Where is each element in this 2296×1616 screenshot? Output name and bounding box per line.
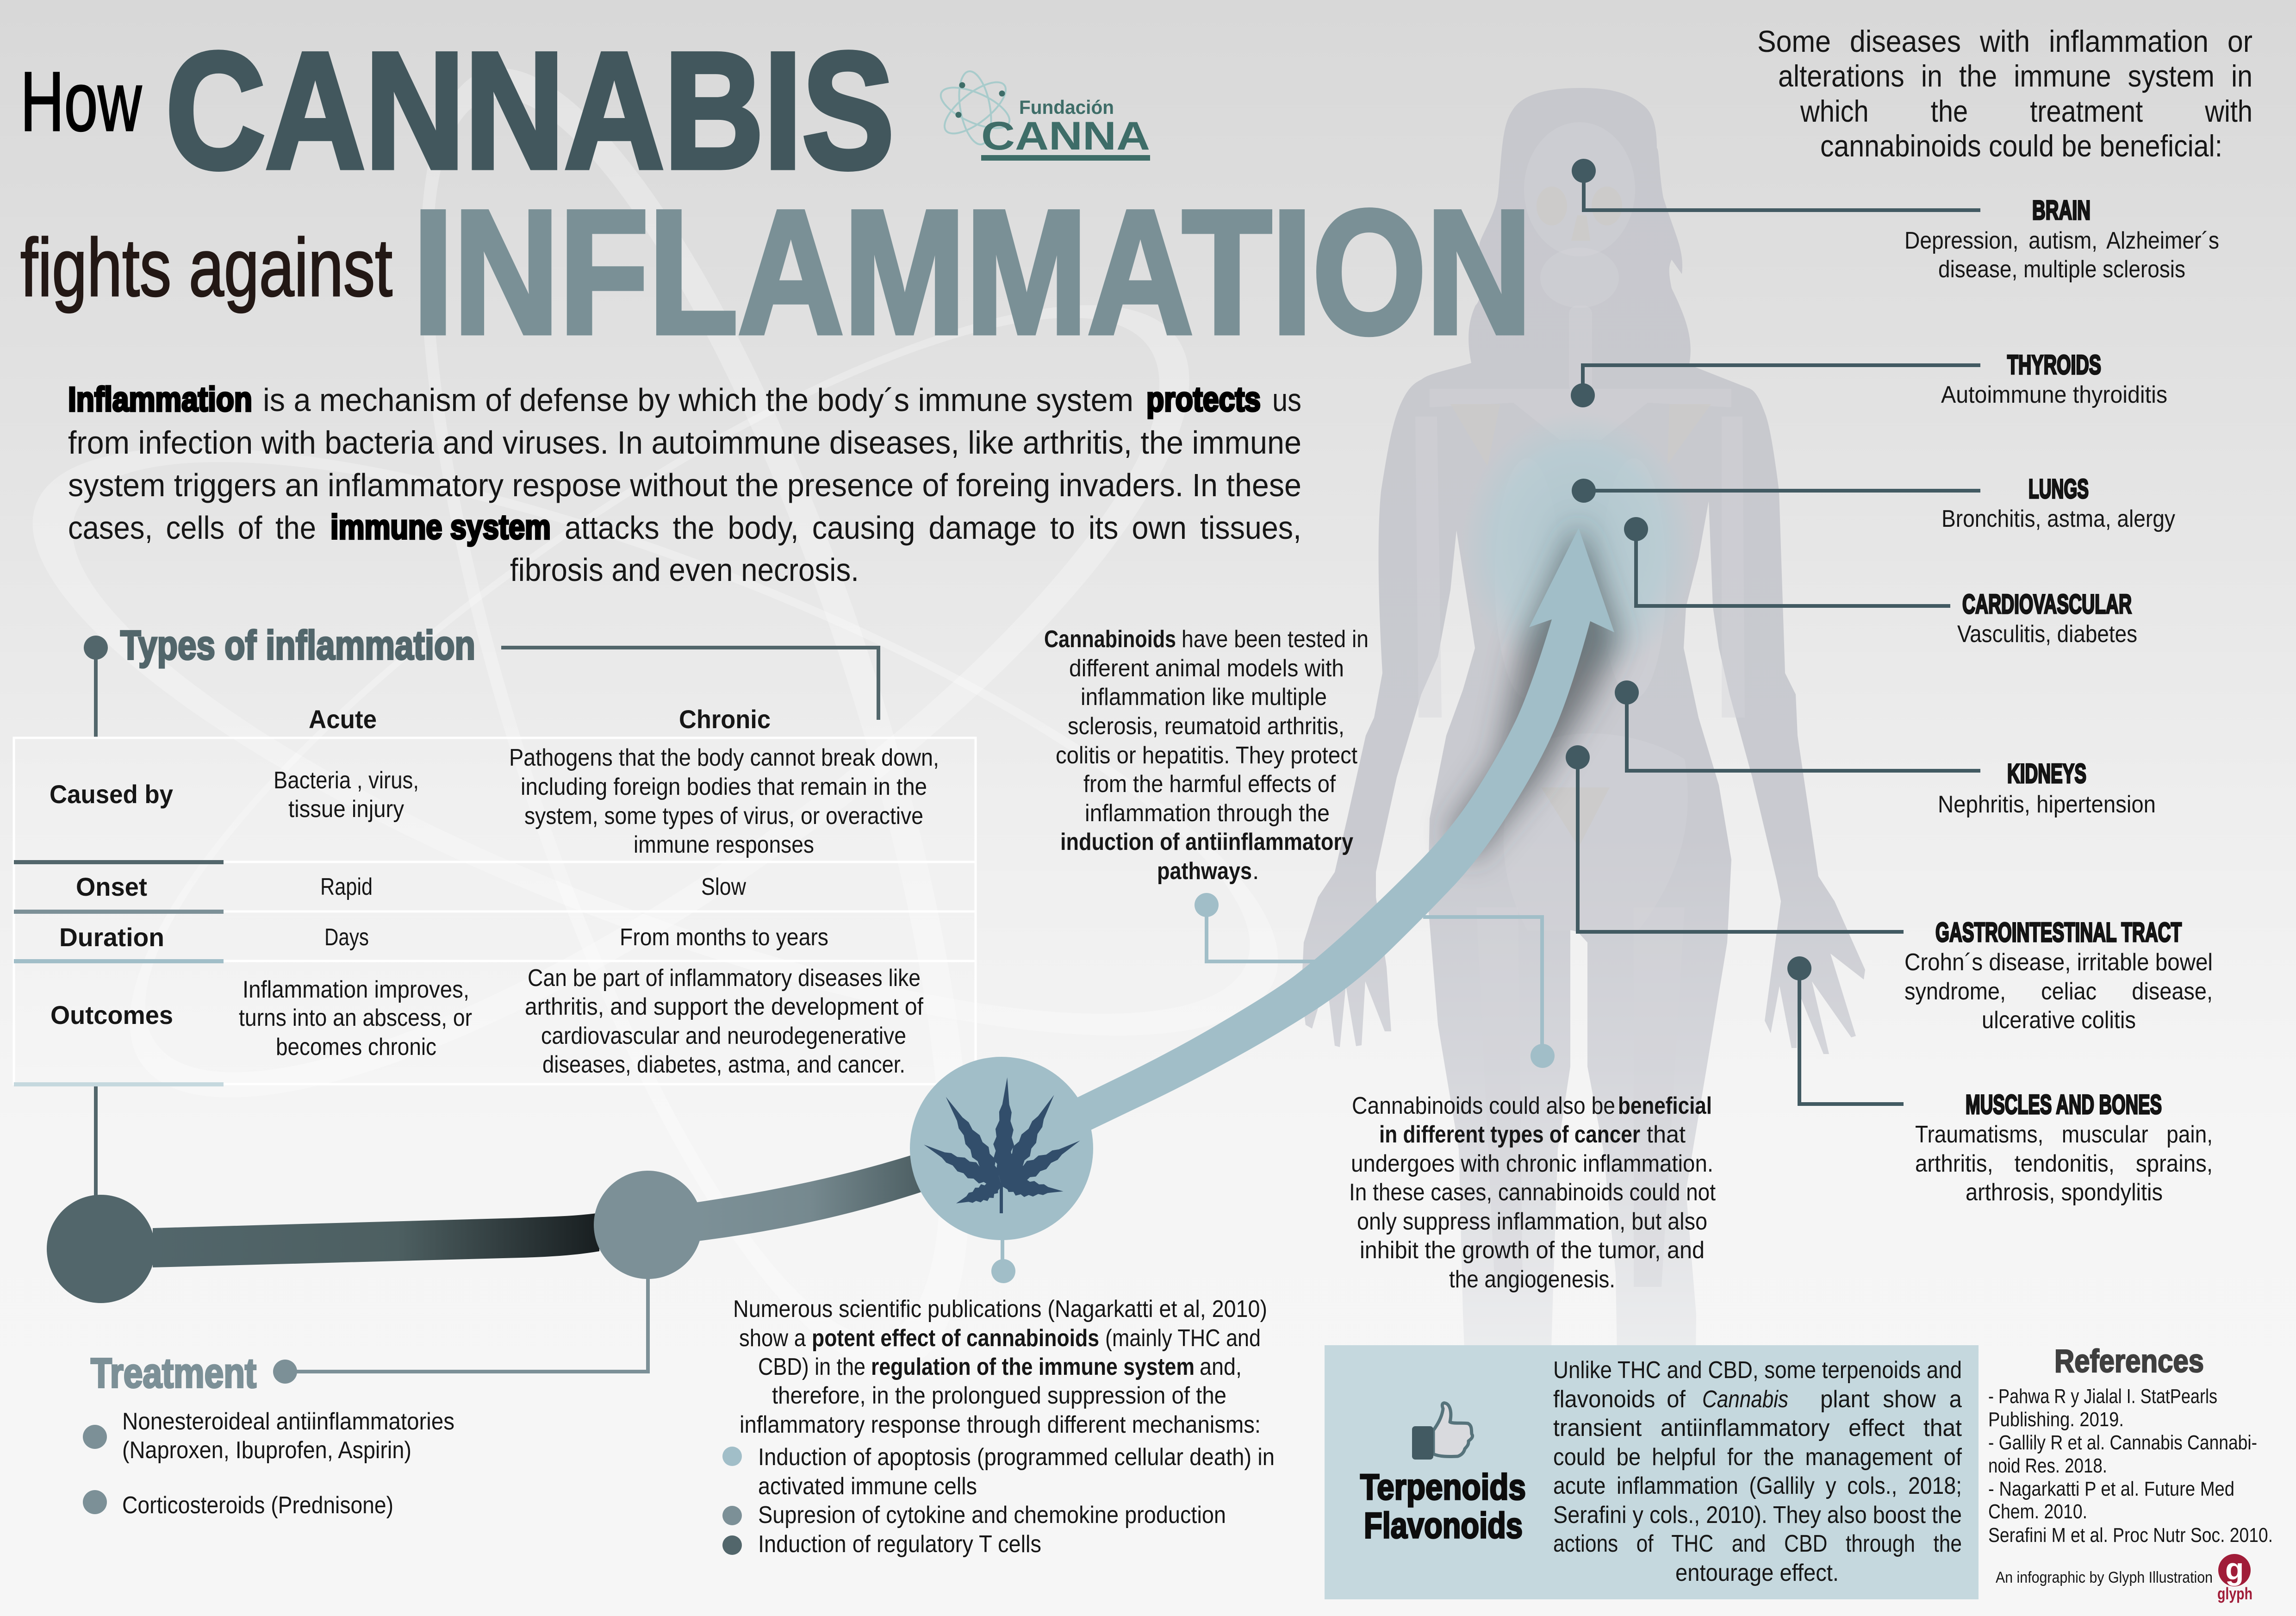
background atom watermark	[0, 13, 1341, 1425]
icon: atom	[935, 69, 1015, 147]
text: cancer: inhibit the growth of the tumor, and	[1360, 1237, 1705, 1264]
heading: treatment: Treatment	[91, 1350, 256, 1397]
text: terpenoids description: Cannabis	[1702, 1386, 1788, 1413]
logo text: Fundación	[1019, 96, 1114, 118]
connector: types of inflammation	[84, 636, 878, 1197]
text: terpenoids description: entourage effect.	[1675, 1560, 1839, 1586]
intro paragraph: protects	[1146, 380, 1261, 418]
row: onset	[76, 872, 746, 901]
panel: terpenoids and flavonoids	[1325, 1345, 1979, 1599]
label: brain: BRAIN	[2032, 195, 2091, 225]
label: cardiovascular: Vasculitis, diabetes	[1957, 621, 2137, 648]
label: muscles and bones: MUSCLES AND BONES	[1966, 1090, 2162, 1120]
text: cancer: in different types of cancer	[1379, 1121, 1640, 1148]
mechanisms list: Induction of regulatory T cells	[758, 1531, 1041, 1558]
text: numerous scientific publications: potent effect of cannabinoids	[812, 1325, 1099, 1352]
label: kidneys	[1938, 759, 2156, 818]
text: diseases intro: Some diseases with inflammation or	[1757, 24, 2252, 58]
heading: terpenoids flavonoids: Flavonoids	[1364, 1505, 1523, 1546]
label: lungs	[1941, 474, 2175, 532]
row: onset: Rapid	[320, 874, 373, 900]
row: onset: Onset	[76, 872, 147, 901]
text: diseases intro	[1757, 24, 2252, 163]
references	[1988, 1343, 2273, 1547]
text: terpenoids description: acute inflammation (Gallily y cols., 2018;	[1553, 1472, 1962, 1499]
title word: How: How	[20, 54, 142, 149]
text: cancer: that	[1647, 1121, 1686, 1148]
text: cannabinoids tested in animal models: colitis or hepatitis. They protect	[1056, 742, 1358, 769]
text: cannabinoids tested in animal models: inflammation like multiple	[1081, 684, 1327, 711]
label: muscles and bones	[1915, 1090, 2213, 1206]
intro paragraph: Inflammation	[68, 380, 252, 418]
text: cannabinoids tested in animal models: Cannabinoids	[1044, 626, 1176, 653]
intro paragraph: attacks the body, causing damage to its own tissues,	[565, 510, 1301, 546]
text: cancer: In these cases, cannabinoids could not	[1349, 1179, 1716, 1206]
node: treatment	[594, 1171, 702, 1279]
text: cancer: only suppress inflammation, but also	[1357, 1208, 1707, 1235]
connector: kidneys	[1615, 680, 1980, 771]
reference list	[1988, 1385, 2273, 1547]
intro paragraph: immune system	[330, 508, 551, 546]
text: cannabinoids tested in animal models: different animal models with	[1069, 655, 1344, 682]
text: numerous scientific publications: (mainly THC and	[1105, 1325, 1261, 1352]
row: caused by: immune responses	[634, 831, 814, 858]
connector: treatment	[273, 1278, 648, 1384]
connector: thyroids	[1571, 365, 1980, 407]
text: diseases intro: cannabinoids could be beneficial:	[1820, 129, 2222, 163]
label: gastrointestinal tract: Crohn´s disease, irritable bowel	[1904, 949, 2213, 976]
title word: INFLAMMATION: INFLAMMATION	[413, 174, 1532, 370]
intro paragraph: us	[1272, 382, 1301, 418]
node: inflammation	[47, 1195, 155, 1303]
label: lungs: LUNGS	[2028, 474, 2089, 504]
label: lungs: Bronchitis, astma, alergy	[1941, 505, 2175, 532]
connector: gastrointestinal	[1566, 745, 1904, 932]
row: caused by	[50, 744, 939, 858]
intro paragraph: from infection with bacteria and viruses. In autoimmune diseases, like arthritis, the immune	[68, 424, 1301, 461]
text: cannabinoids tested in animal models: from the harmful effects of	[1083, 771, 1336, 798]
icon: thumbs up	[1412, 1403, 1473, 1460]
title word: CANNABIS: CANNABIS	[166, 18, 894, 203]
mechanisms list	[722, 1444, 1275, 1558]
label: gastrointestinal tract: syndrome, celiac disease,	[1904, 978, 2213, 1005]
row: outcomes: becomes chronic	[276, 1034, 436, 1061]
node: cannabis with leaf icon	[910, 1057, 1093, 1240]
row: caused by: system, some types of virus, or overactive	[524, 803, 923, 830]
label: gastrointestinal tract: ulcerative colitis	[1982, 1007, 2136, 1034]
connector: cancer text	[1423, 917, 1555, 1068]
mechanisms list: activated immune cells	[758, 1473, 977, 1500]
table: types of inflammation	[14, 705, 976, 1086]
row: outcomes: Inflammation improves,	[243, 976, 469, 1003]
text: cannabinoids tested in animal models	[1044, 626, 1369, 885]
label: muscles and bones: Traumatisms, muscular pain,	[1915, 1121, 2213, 1148]
text: cannabinoids tested in animal models: sclerosis, reumatoid arthritis,	[1068, 713, 1344, 740]
treatment list: (Naproxen, Ibuprofen, Aspirin)	[122, 1437, 411, 1464]
row: duration: From months to years	[620, 924, 828, 951]
label: brain: disease, multiple sclerosis	[1938, 256, 2185, 283]
human body silhouette	[1301, 88, 1865, 1528]
column header: chronic: Chronic	[679, 705, 771, 734]
text: cannabinoids tested in animal models: have been tested in	[1182, 626, 1369, 653]
row: outcomes: Can be part of inflammatory diseases like	[528, 965, 921, 992]
text: cannabinoids tested in animal models: induction of antiinflammatory	[1060, 829, 1353, 855]
row: caused by: Pathogens that the body cannot break down,	[509, 744, 939, 771]
mechanisms list: Induction of apoptosis (programmed cellular death) in	[758, 1444, 1275, 1471]
reference list: Publishing. 2019.	[1988, 1408, 2124, 1431]
row: caused by: including foreign bodies that remain in the	[521, 774, 927, 800]
credit: glyph illustration: glyph	[2217, 1584, 2252, 1603]
intro paragraph: system triggers an inflammatory respose without the presence of foreing invaders. In these	[68, 467, 1301, 503]
label: cardiovascular: CARDIOVASCULAR	[1962, 589, 2132, 619]
row: outcomes: diseases, diabetes, astma, and cancer.	[542, 1051, 905, 1078]
text: terpenoids description: actions of THC and CBD through the	[1553, 1530, 1962, 1557]
skeleton bones	[1415, 122, 1745, 1287]
connector: muscles and bones	[1787, 956, 1904, 1104]
row: duration: Duration	[59, 923, 164, 952]
reference list: - Pahwa R y Jialal I. StatPearls	[1988, 1385, 2217, 1408]
text: numerous scientific publications: CBD) in the	[758, 1354, 865, 1380]
label: thyroids	[1941, 350, 2167, 408]
text: numerous scientific publications: show a	[739, 1325, 806, 1352]
row: caused by: Caused by	[50, 780, 173, 809]
label: gastrointestinal tract: GASTROINTESTINAL TRACT	[1935, 917, 2182, 948]
row: outcomes: turns into an abscess, or	[239, 1005, 472, 1031]
text: numerous scientific publications: and,	[1200, 1354, 1242, 1380]
text: cancer: the angiogenesis.	[1449, 1266, 1615, 1293]
heading: terpenoids flavonoids	[1360, 1466, 1526, 1546]
row: caused by: Bacteria , virus,	[274, 767, 419, 794]
logo wordmark: CANNA	[981, 114, 1150, 158]
intro paragraph: is a mechanism of defense by which the body´s immune system	[263, 382, 1133, 418]
connector: lungs	[1572, 479, 1980, 503]
text: terpenoids description: Unlike THC and CBD, some terpenoids and	[1553, 1357, 1962, 1384]
logo: Fundación Canna	[935, 69, 1150, 161]
credit: glyph illustration: g	[2225, 1552, 2244, 1586]
text: terpenoids description: transient antiinflammatory effect that	[1553, 1415, 1962, 1441]
arrow shadow	[1449, 523, 1620, 861]
credit: glyph illustration	[1996, 1552, 2252, 1603]
label: kidneys: KIDNEYS	[2007, 759, 2086, 789]
row: onset: Slow	[701, 874, 746, 900]
label: brain	[1904, 195, 2219, 283]
treatment list: Nonesteroideal antiinflammatories	[122, 1408, 454, 1435]
label: thyroids: THYROIDS	[2007, 350, 2101, 380]
treatment list	[83, 1408, 454, 1519]
curved arrow towards lungs	[1071, 528, 1614, 1131]
label: muscles and bones: arthrosis, spondylitis	[1966, 1179, 2163, 1206]
credit: glyph illustration: An infographic by Glyph Illustration	[1996, 1569, 2213, 1586]
label: thyroids: Autoimmune thyroiditis	[1941, 381, 2167, 408]
icon: cannabis leaf	[920, 1077, 1084, 1213]
intro paragraph: cases, cells of the	[68, 510, 316, 546]
inflammation glow	[1461, 412, 1697, 680]
text: cancer: Cannabinoids could also be	[1352, 1092, 1615, 1119]
reference list: - Nagarkatti P et al. Future Med	[1988, 1478, 2234, 1500]
text: terpenoids description: Serafini y cols., 2010). They also boost the	[1553, 1502, 1962, 1529]
row: caused by: tissue injury	[288, 796, 404, 823]
table grid	[14, 738, 976, 1086]
treatment list: Corticosteroids (Prednisone)	[122, 1492, 393, 1519]
text: cannabinoids tested in animal models: .	[1252, 858, 1259, 885]
row: duration	[59, 923, 828, 952]
heading: references: References	[2054, 1343, 2204, 1379]
label: brain: Depression, autism, Alzheimer´s	[1904, 227, 2219, 254]
title	[20, 18, 1532, 370]
intro paragraph	[68, 380, 1301, 588]
connector: brain	[1572, 159, 1980, 210]
text: numerous scientific publications: Numerous scientific publications (Nagarkatti et al, 2010)	[733, 1296, 1267, 1323]
title words: fights against: fights against	[20, 222, 392, 313]
pathway segment: treatment to cannabis	[694, 1154, 926, 1242]
organ connectors	[1566, 159, 1980, 1104]
text: numerous scientific publications: inflammatory response through different mechanisms:	[740, 1411, 1261, 1438]
text: terpenoids description: flavonoids of	[1553, 1386, 1686, 1413]
row: outcomes: cardiovascular and neurodegenerative	[541, 1023, 906, 1049]
label: cardiovascular	[1957, 589, 2137, 648]
intro paragraph: fibrosis and even necrosis.	[510, 552, 859, 588]
connector: cannabinoids text	[1195, 893, 1324, 961]
text: cancer: undergoes with chronic inflammation.	[1351, 1150, 1713, 1177]
text: cancer	[1349, 1092, 1716, 1293]
heading: types of inflammation: Types of inflammation	[120, 622, 475, 668]
label: gastrointestinal tract	[1904, 917, 2213, 1034]
text: diseases intro: alterations in the immune system in	[1778, 59, 2252, 93]
text: terpenoids description: could be helpful for the management of	[1553, 1444, 1962, 1471]
connector: cardiovascular	[1624, 517, 1950, 606]
row: outcomes: Outcomes	[50, 1000, 173, 1029]
reference list: Chem. 2010.	[1988, 1500, 2087, 1523]
text: cancer: beneficial	[1618, 1092, 1712, 1119]
connector: cannabis to publications	[991, 1238, 1015, 1283]
row: outcomes: arthritis, and support the development of	[525, 993, 924, 1020]
text: cannabinoids tested in animal models: inflammation through the	[1085, 800, 1330, 827]
text: cannabinoids tested in animal models: pathways	[1157, 858, 1252, 885]
text: terpenoids description: plant show a	[1820, 1386, 1962, 1413]
column header: acute: Acute	[309, 705, 377, 734]
reference list: noid Res. 2018.	[1988, 1454, 2107, 1477]
heading: terpenoids flavonoids: Terpenoids	[1360, 1466, 1526, 1507]
label: kidneys: Nephritis, hipertension	[1938, 791, 2156, 818]
text: numerous scientific publications: regulation of the immune system	[871, 1354, 1195, 1380]
text: numerous scientific publications	[733, 1296, 1267, 1438]
text: numerous scientific publications: therefore, in the prolongued suppression of the	[772, 1382, 1226, 1409]
mechanisms list: Supresion of cytokine and chemokine production	[758, 1502, 1226, 1529]
text: terpenoids description	[1553, 1357, 1962, 1586]
row: duration: Days	[324, 924, 369, 951]
row: outcomes	[50, 965, 924, 1078]
label: muscles and bones: arthritis, tendonitis, sprains,	[1915, 1150, 2213, 1177]
pathway segment: inflammation to treatment	[153, 1213, 599, 1267]
